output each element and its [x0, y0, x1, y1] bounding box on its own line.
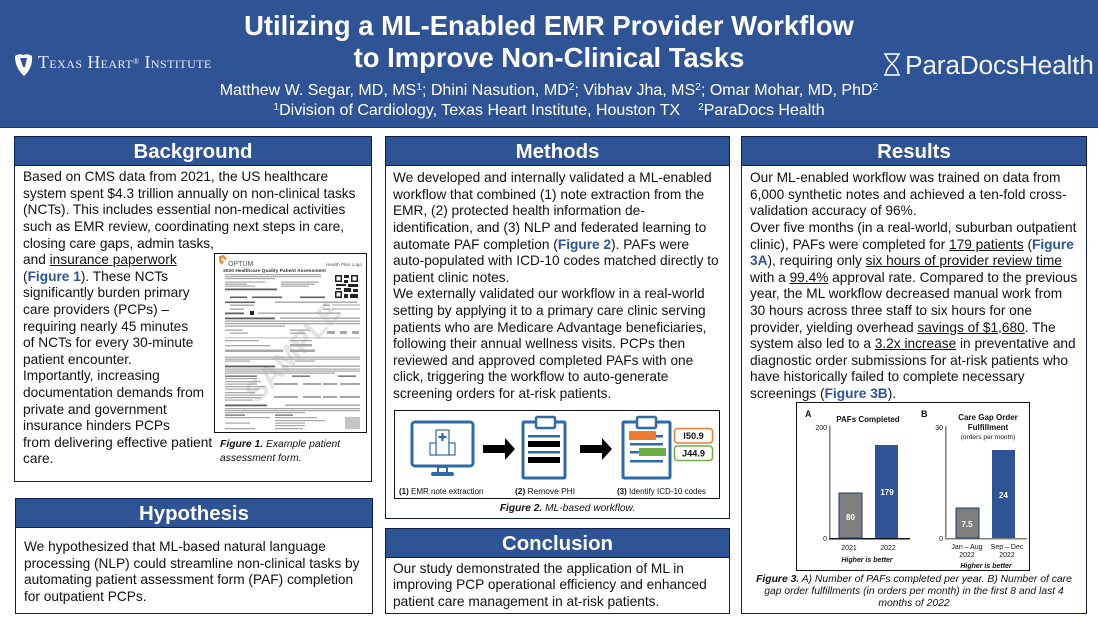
header banner — [0, 0, 1098, 128]
code box: J44.9: J44.9 — [682, 448, 705, 458]
label: step 2: (2) Remove PHI — [515, 486, 575, 496]
heading: methods — [386, 137, 729, 166]
heading: conclusion — [386, 529, 729, 558]
text: background: of NCTs for every 30-minute — [23, 335, 193, 350]
authors and affiliations — [220, 82, 878, 118]
title: Utilizing a ML-Enabled EMR Provider Workflow — [244, 10, 854, 41]
icon: clipboard with icd-10 highlights — [623, 417, 670, 478]
text: background: Importantly, increasing — [23, 368, 160, 383]
icon: optum logo — [219, 255, 253, 268]
text: hypothesis: processing (NLP) could streamline non-clinical tasks by — [24, 556, 359, 571]
text: results: system also led to a 3.2x increase in preventative and — [750, 336, 1076, 351]
text: results: Our ML-enabled workflow was trained on data from — [750, 170, 1060, 185]
text: methods: identification, and (3) NLP and federated learning to — [393, 220, 706, 235]
text: results: with a 99.4% approval rate. Compared to the previous — [750, 270, 1077, 285]
authors and affiliations: 1Division of Cardiology, Texas Heart Institute, Houston TX 2ParaDocs Health — [273, 102, 825, 118]
text: conclusion — [393, 560, 707, 609]
text: results: diagnostic order submissions for at-risk patients who — [750, 353, 1068, 368]
text: background: and insurance paperwork — [23, 252, 177, 267]
text: methods: click, triggering the workflow to auto-generate — [393, 369, 668, 384]
figure 1: example patient assessment form: Health Plan Logo — [326, 262, 362, 267]
figure 1: example patient assessment form — [214, 253, 367, 433]
heading: hypothesis — [16, 499, 372, 528]
chart a: pafs completed: 0 — [823, 536, 827, 543]
text: background: requiring nearly 45 minutes — [23, 319, 188, 334]
label: step 3: (3) Identify ICD-10 codes — [617, 487, 706, 496]
heading: results: Results — [877, 141, 951, 163]
text: background — [23, 169, 355, 466]
chart a: pafs completed: A — [805, 409, 812, 419]
icon: emr monitor — [412, 422, 473, 476]
text: hypothesis: automating patient assessment form (PAF) completion — [24, 572, 353, 587]
chart a: pafs completed: Higher is better — [841, 557, 894, 564]
code box: I50.9 — [674, 428, 712, 443]
logo: Texas Heart Institute: Texas Heart® Institute — [38, 52, 212, 72]
chart a: pafs completed: 200 — [815, 425, 827, 432]
text: hypothesis: We hypothesized that ML-based natural language — [24, 539, 326, 554]
heading: background: Background — [134, 141, 252, 163]
text: background: system spent $4.3 trillion annually on non-clinical tasks — [23, 186, 355, 201]
chart b: care gap order fulfillment: Fulfillment — [968, 423, 1009, 432]
icon: qr code — [335, 275, 358, 298]
chart b: care gap order fulfillment: 2022 — [999, 552, 1015, 559]
text: results: 30 hours across three staff to six hours for one — [750, 303, 1032, 318]
text: background: from delivering effective patient — [23, 435, 212, 450]
chart b: care gap order fulfillment: (orders per month) — [961, 434, 1015, 441]
panel: hypothesis — [15, 498, 373, 614]
text: background: private and government — [23, 402, 167, 416]
chart b: care gap order fulfillment: Jan – Aug — [951, 544, 983, 551]
text: results — [750, 170, 1077, 401]
text: background: documentation demands from — [23, 385, 204, 400]
arrow — [483, 438, 515, 460]
text: results: 6,000 synthetic notes and achieved a ten-fold cross- — [750, 187, 1067, 202]
text: background: care providers (PCPs) – — [23, 302, 169, 317]
code box: J44.9 — [674, 446, 712, 460]
text: methods: We developed and internally validated a ML-enabled — [393, 170, 712, 185]
text: methods: patient clinic notes. — [393, 270, 509, 285]
chart b: care gap order fulfillment: 30 — [935, 425, 943, 432]
text: background: insurance hinders PCPs — [23, 418, 170, 433]
text: hypothesis: for outpatient PCPs. — [24, 589, 146, 604]
text: methods: automate PAF completion (Figure 2). PAFs were — [393, 237, 689, 252]
chart b: care gap order fulfillment: B — [921, 409, 928, 419]
arrow — [580, 438, 612, 460]
panel: background — [14, 136, 372, 482]
text: conclusion: improving PCP operational efficiency and enhanced — [393, 577, 707, 592]
text: methods: EMR, (2) protected health information de- — [393, 203, 645, 218]
chart a: pafs completed: 2021 — [841, 545, 857, 552]
text: methods: auto-populated with ICD-10 codes matched directly to — [393, 253, 719, 268]
title — [244, 10, 854, 73]
text: results: 3A), requiring only six hours of provider review time — [750, 253, 1062, 268]
text: conclusion: Our study demonstrated the application of ML in — [393, 560, 684, 576]
chart a: pafs completed: PAFs Completed — [836, 415, 900, 424]
heading: results — [742, 137, 1086, 166]
text: results: validation accuracy of 96%. — [750, 203, 917, 218]
caption: figure 3: gap order fulfillments (in orders per month) in the first 8 and last 4 — [764, 586, 1064, 597]
text: results: clinic), PAFs were completed for 179 patients (Figure — [750, 237, 1074, 252]
panel: results — [741, 136, 1087, 614]
text: results: screenings (Figure 3B). — [750, 386, 896, 401]
text: results: year, the ML workflow decreased manual work from — [750, 286, 1062, 301]
caption: figure 1 — [220, 439, 340, 464]
caption: figure 3: months of 2022 — [878, 598, 950, 609]
chart b: care gap order fulfillment: Sep – Dec — [991, 544, 1024, 551]
text: methods: screening orders for at-risk patients. — [393, 386, 611, 401]
text: methods: following their annual wellness visits. PCPs then — [393, 336, 685, 351]
text: methods: setting by applying it to a primary care clinic serving — [393, 303, 706, 318]
text: background: Based on CMS data from 2021, the US healthcare — [23, 169, 328, 184]
text: methods: workflow that combined (1) note extraction from the — [393, 187, 704, 202]
logo: ParaDocs Health: ParaDocsHealth — [905, 50, 1094, 80]
caption: figure 3: Figure 3. A) Number of PAFs completed per year. B) Number of care — [756, 574, 1072, 585]
heading: hypothesis: Hypothesis — [139, 503, 249, 525]
text: background: (NCTs). This includes essential non-medical activities — [23, 202, 345, 217]
label: step 1: (1) EMR note extraction — [399, 487, 483, 496]
text: methods: We externally validated our workflow in a real-world — [393, 286, 705, 301]
code box: I50.9: I50.9 — [683, 431, 704, 441]
caption: figure 3 — [756, 574, 1072, 609]
text: background: significantly burden primary — [23, 285, 190, 300]
text: results: provider, yielding overhead savings of $1,680. The — [750, 320, 1056, 335]
heading: background — [15, 137, 371, 166]
figure 2: ml-based workflow diagram — [394, 410, 720, 499]
text: background: patient encounter. — [23, 352, 132, 367]
chart a: pafs completed: 80 — [846, 513, 855, 522]
care priority box — [250, 311, 254, 315]
chart b: care gap order fulfillment: 2022 — [959, 552, 975, 559]
panel: methods — [385, 136, 730, 519]
text: background: such as EMR review, coordinating next steps in care, — [23, 219, 344, 234]
text: methods — [393, 170, 719, 401]
text: hypothesis — [24, 539, 360, 604]
text: background: closing care gaps, admin tasks, — [23, 236, 214, 251]
text: background: (Figure 1). These NCTs — [23, 269, 168, 284]
chart b: care gap order fulfillment: 7.5 — [961, 520, 973, 529]
chart b: care gap order fulfillment: 0 — [939, 536, 943, 543]
figure 1: example patient assessment form: 2020 Healthcare Quality Patient Assessment — [223, 268, 326, 274]
text: methods: patients who are Medicare Advantage beneficiaries, — [393, 320, 706, 335]
chart a: pafs completed — [805, 409, 910, 564]
figure 3: bar charts — [796, 402, 1030, 571]
chart b: care gap order fulfillment: Care Gap Order — [958, 413, 1018, 422]
chart a: pafs completed: 179 — [880, 488, 894, 497]
icon: optum logo: OPTUM — [228, 261, 253, 268]
text: results: have historically failed to complete necessary — [750, 369, 1025, 384]
sample watermark: SAMPLE — [239, 295, 348, 409]
icon: clipboard remove phi — [523, 417, 565, 478]
title: to Improve Non-Clinical Tasks — [354, 42, 744, 73]
text: conclusion: patient care management in at-risk patients. — [393, 594, 659, 609]
text: background: care. — [23, 451, 53, 466]
chart a: pafs completed: 2022 — [880, 545, 896, 552]
caption: figure 2: Figure 2. ML-based workflow. — [500, 503, 635, 514]
heading: methods: Methods — [516, 141, 599, 163]
chart b: care gap order fulfillment: Higher is better — [960, 563, 1013, 570]
heading: conclusion: Conclusion — [502, 533, 613, 555]
caption: figure 1: assessment form. — [220, 452, 302, 464]
caption: figure 1: Figure 1. Example patient — [220, 439, 340, 450]
text: results: Over five months (in a real-world, suburban outpatient — [750, 220, 1076, 235]
panel: conclusion — [385, 528, 730, 614]
authors and affiliations: Matthew W. Segar, MD, MS1; Dhini Nasution, MD2; Vibhav Jha, MS2; Omar Mohar, MD, PhD2 — [220, 82, 878, 98]
text: methods: reviewed and approved completed PAFs with one — [393, 353, 693, 368]
chart b: care gap order fulfillment: 24 — [999, 491, 1008, 500]
chart b: care gap order fulfillment — [921, 409, 1027, 570]
